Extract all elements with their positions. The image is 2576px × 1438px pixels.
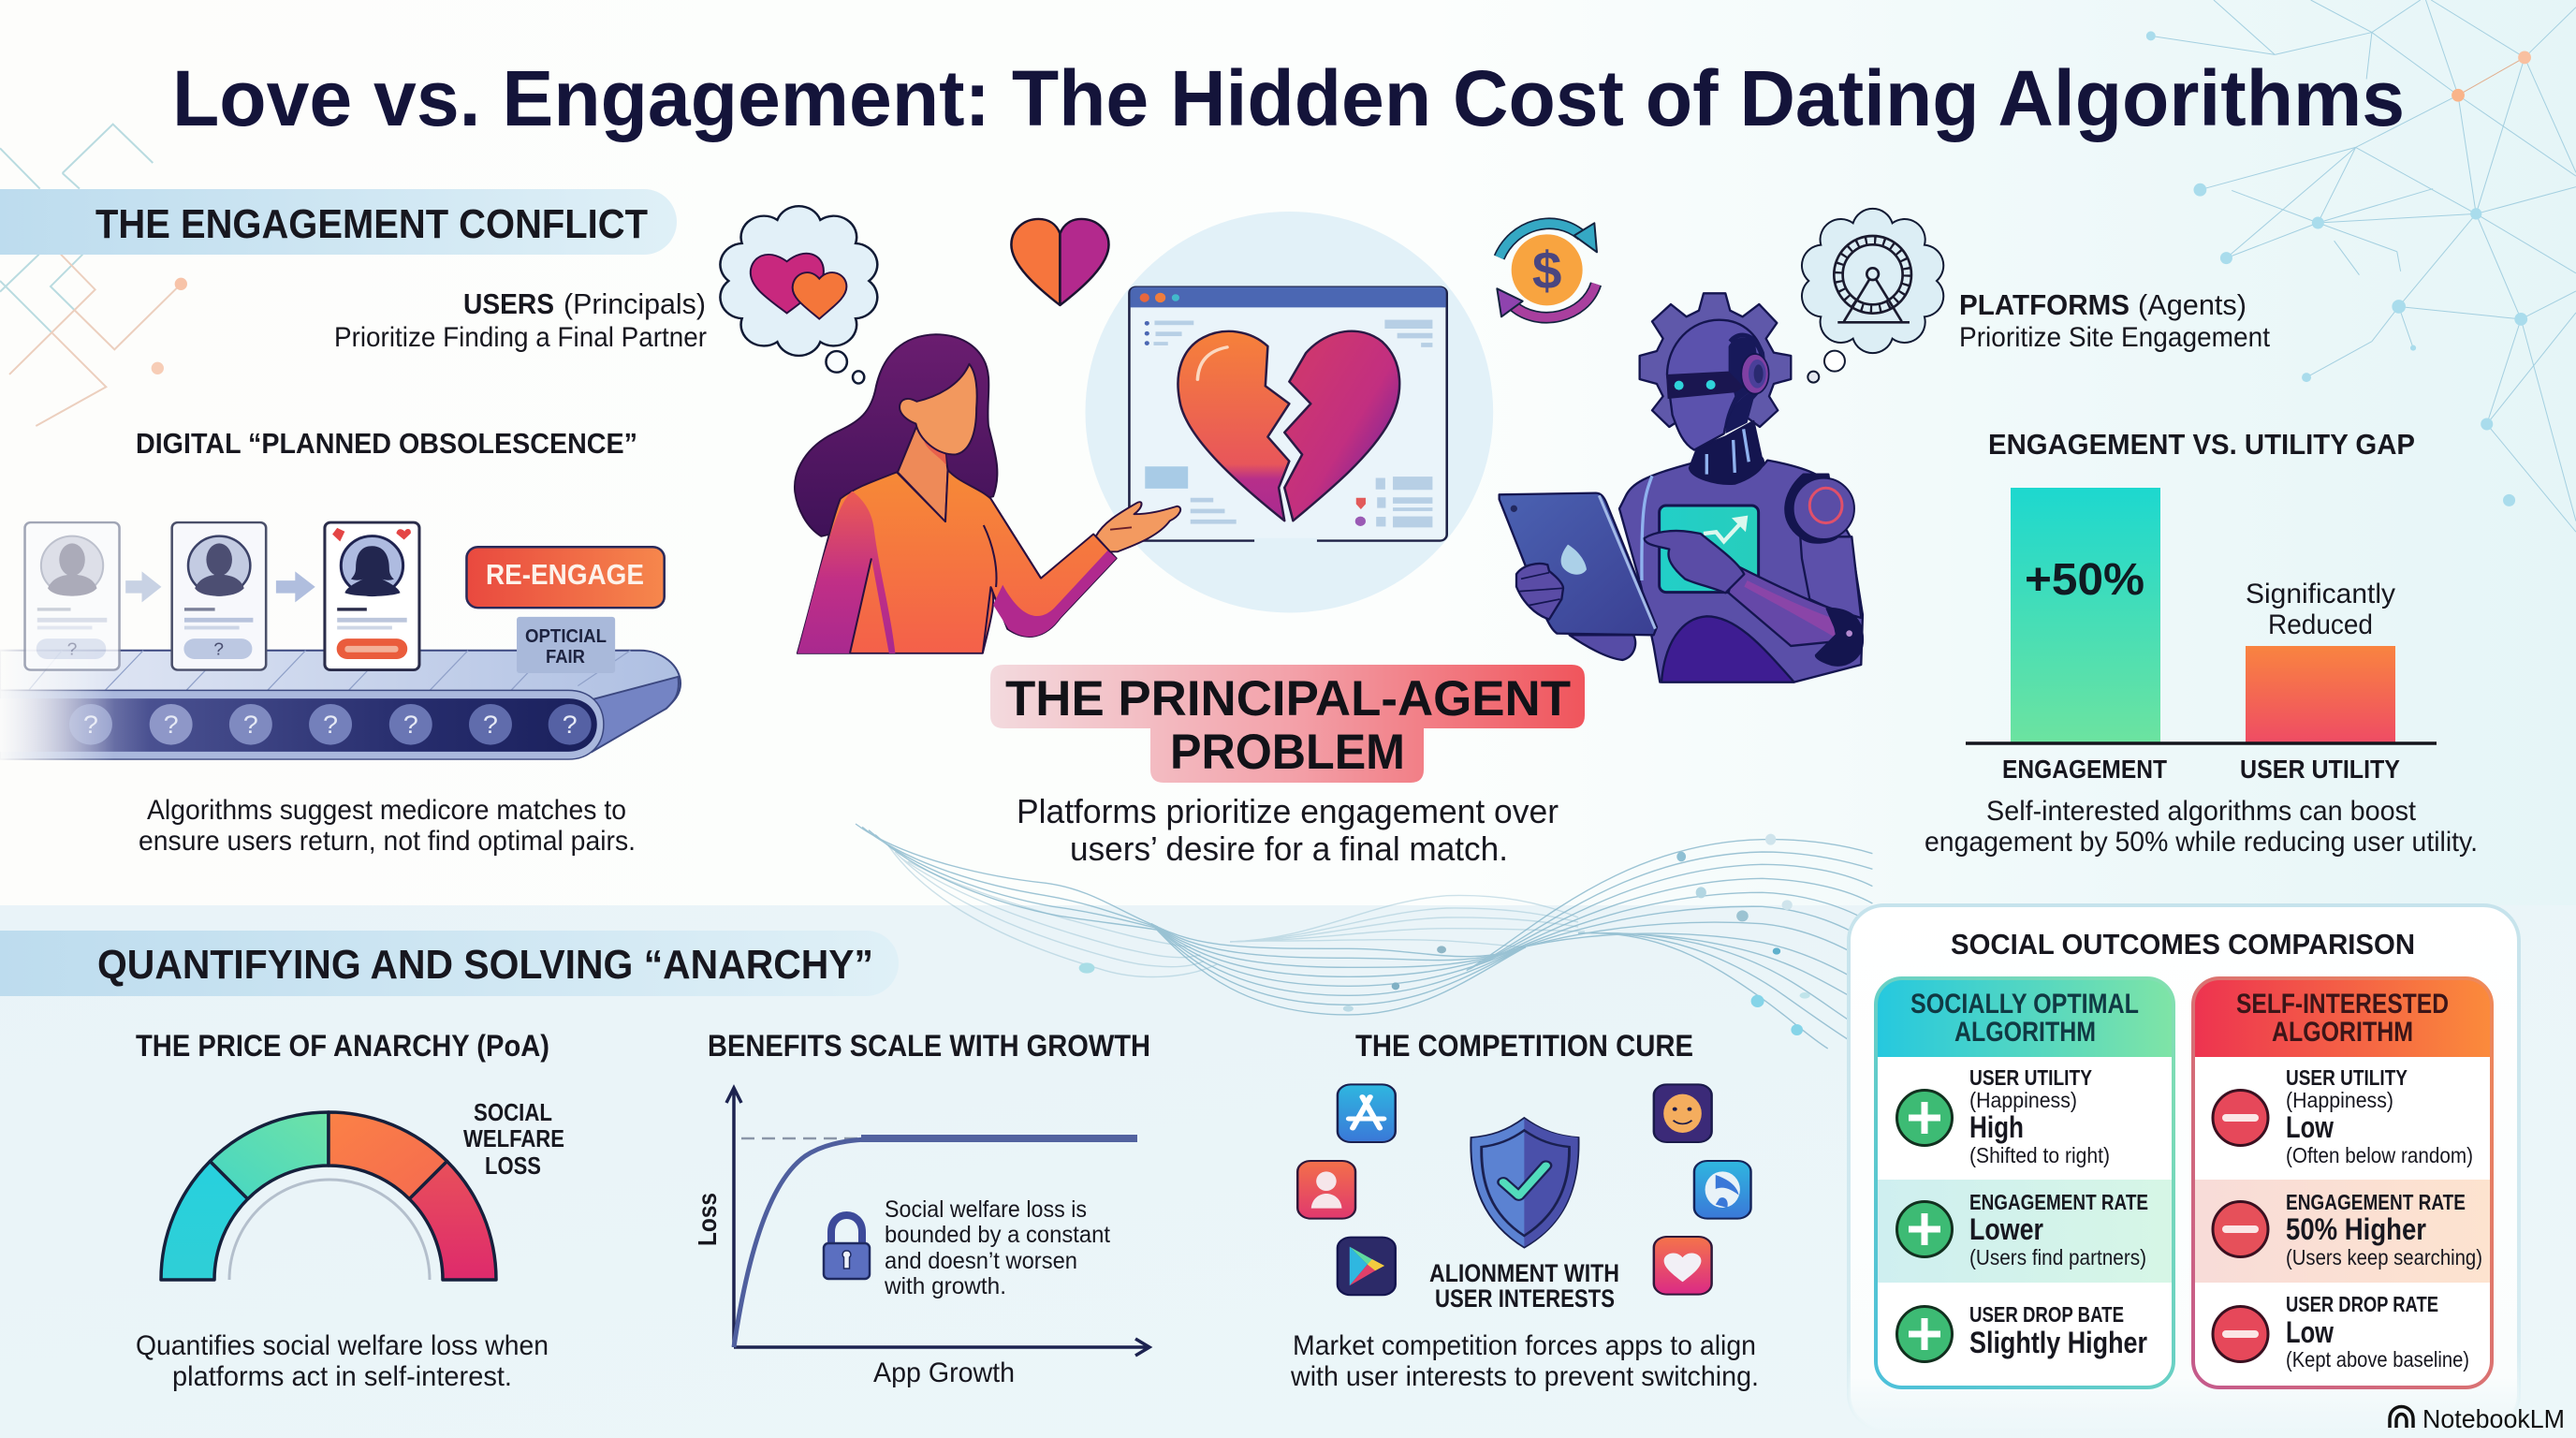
heading: price of anarchy: THE PRICE OF ANARCHY (PoA) bbox=[136, 1029, 549, 1063]
section banner: the engagement conflict: THE ENGAGEMENT CONFLICT bbox=[95, 201, 648, 247]
pointing arm bbox=[1645, 531, 1863, 666]
bar: user utility bbox=[2246, 646, 2395, 742]
value +50%: +50% bbox=[2025, 555, 2144, 605]
money cycle icon bbox=[1497, 223, 1597, 317]
heading: engagement vs utility gap: ENGAGEMENT VS. UTILITY GAP bbox=[1988, 428, 2415, 461]
bar chart bbox=[1966, 488, 2437, 784]
row: engagement rate bbox=[1896, 1190, 2148, 1269]
icon: lock bbox=[824, 1215, 870, 1279]
platforms label: (Agents) bbox=[2138, 288, 2247, 321]
value significantly reduced: Reduced bbox=[2268, 609, 2373, 640]
conveyor belt: ? bbox=[323, 711, 338, 739]
row: engagement rate: (Users keep searching) bbox=[2286, 1245, 2482, 1269]
split heart icon bbox=[1011, 219, 1108, 305]
icon: smile bbox=[1654, 1084, 1712, 1142]
row: user utility: (Happiness) bbox=[2286, 1088, 2393, 1112]
header text: SOCIALLY OPTIMAL bbox=[1910, 989, 2139, 1020]
profile card 2 bbox=[172, 522, 266, 670]
header text: ALGORITHM bbox=[1954, 1017, 2096, 1048]
row: engagement rate bbox=[2213, 1190, 2482, 1269]
body: self-interested algorithms bbox=[1925, 796, 2478, 858]
chart annotation: and doesn’t worsen bbox=[885, 1248, 1077, 1274]
row: user utility: (Happiness) bbox=[1969, 1088, 2077, 1112]
re-engage button bbox=[466, 547, 665, 608]
robot torso bbox=[1619, 461, 1863, 682]
browser window bbox=[1129, 287, 1447, 543]
decorative wave lines bbox=[856, 824, 1872, 1049]
row: user utility: High bbox=[1969, 1110, 2024, 1144]
gauge label: SOCIAL bbox=[474, 1098, 552, 1126]
arrow between cards 1 and 2 bbox=[125, 571, 161, 602]
section banner: the engagement conflict bbox=[0, 189, 677, 255]
y axis label: Loss bbox=[693, 1193, 722, 1246]
conveyor belt: ? bbox=[403, 711, 418, 739]
body: self-interested algorithms: Self-interested algorithms can boost bbox=[1986, 796, 2417, 827]
body: quantifies: platforms act in self-interest. bbox=[172, 1361, 512, 1392]
woman figure bbox=[795, 334, 1180, 653]
background top bbox=[0, 0, 2576, 906]
users label: Prioritize Finding a Final Partner bbox=[334, 322, 707, 353]
robot head bbox=[1666, 320, 1769, 450]
row: user utility bbox=[2213, 1065, 2473, 1167]
body: algorithms: Algorithms suggest medicore matches to bbox=[147, 795, 626, 826]
row: user utility bbox=[1896, 1065, 2110, 1167]
section banner: quantifying and solving anarchy: QUANTIFYING AND SOLVING “ANARCHY” bbox=[97, 942, 873, 988]
x axis label: App Growth bbox=[873, 1357, 1015, 1388]
thought bubble with hamster wheel bbox=[1802, 209, 1943, 383]
decorative circuit lines top left bbox=[0, 125, 187, 426]
optical fair label bbox=[525, 626, 607, 668]
gauge label: WELFARE bbox=[463, 1124, 564, 1152]
profile card 1: ? bbox=[67, 640, 77, 659]
icon: play store bbox=[1338, 1238, 1396, 1295]
row: user drop rate bbox=[2213, 1292, 2469, 1372]
body: platforms prioritize bbox=[1017, 792, 1559, 868]
conveyor belt: ? bbox=[483, 711, 498, 739]
gear bbox=[1640, 293, 1791, 427]
conveyor belt: ? bbox=[83, 711, 98, 739]
body: market competition: with user interests to prevent switching. bbox=[1290, 1361, 1759, 1392]
holding hand bbox=[1516, 564, 1563, 620]
profile card 2: ? bbox=[213, 640, 224, 659]
pale circle backdrop bbox=[1085, 212, 1493, 612]
icon: shield bbox=[1471, 1118, 1578, 1248]
money cycle icon: $ bbox=[1532, 242, 1561, 301]
robot illustration bbox=[1497, 209, 1943, 682]
body: algorithms bbox=[139, 795, 636, 857]
gauge label: LOSS bbox=[485, 1152, 541, 1180]
row: engagement rate: Lower bbox=[1969, 1212, 2043, 1246]
conveyor illustration bbox=[0, 522, 681, 768]
optical fair label: FAIR bbox=[546, 647, 586, 668]
header text bbox=[2236, 989, 2449, 1048]
profile card 1 bbox=[25, 522, 120, 670]
row: user drop rate: Low bbox=[2286, 1315, 2334, 1349]
platforms label: PLATFORMS bbox=[1959, 288, 2130, 321]
body: self-interested algorithms: engagement by 50% while reducing user utility. bbox=[1925, 827, 2478, 858]
column: self-interested algorithm bbox=[2193, 978, 2492, 1387]
chart annotation: Social welfare loss is bbox=[885, 1196, 1087, 1223]
heading: digital planned obsolescence: DIGITAL “PLANNED OBSOLESCENCE” bbox=[136, 427, 637, 460]
icon: app store bbox=[1338, 1084, 1396, 1142]
watermark: notebooklm: NotebookLM bbox=[2422, 1404, 2565, 1433]
row: engagement rate: ENGAGEMENT RATE bbox=[1969, 1190, 2148, 1214]
header text: SELF-INTERESTED bbox=[2236, 989, 2449, 1020]
heading: the competition cure: THE COMPETITION CURE bbox=[1355, 1029, 1693, 1063]
chest screen bbox=[1660, 506, 1759, 593]
column: socially optimal algorithm bbox=[1876, 978, 2174, 1387]
users label bbox=[334, 287, 707, 353]
users label: (Principals) bbox=[564, 287, 706, 320]
tablet bbox=[1500, 493, 1657, 635]
profile card 3 bbox=[325, 522, 419, 670]
label: alignment with user interests: USER INTERESTS bbox=[1435, 1284, 1615, 1313]
row: engagement rate: ENGAGEMENT RATE bbox=[2286, 1190, 2466, 1214]
row: user utility: Low bbox=[2286, 1110, 2334, 1144]
row: user drop rate: (Kept above baseline) bbox=[2286, 1347, 2469, 1372]
row: user drop rate: USER DROP RATE bbox=[2286, 1292, 2438, 1316]
body: market competition bbox=[1290, 1330, 1759, 1392]
optical fair tag bbox=[517, 617, 615, 673]
label: alignment with user interests: ALIONMENT WITH bbox=[1429, 1259, 1619, 1287]
line chart bbox=[693, 1088, 1149, 1388]
body: market competition: Market competition forces apps to align bbox=[1293, 1330, 1756, 1361]
heading: the principal-agent problem: THE PRINCIPAL-AGENT bbox=[1005, 671, 1571, 726]
body: platforms prioritize: Platforms prioritize engagement over bbox=[1017, 792, 1559, 830]
center illustration: user and broken heart bbox=[720, 206, 1493, 653]
platforms label: Prioritize Site Engagement bbox=[1959, 322, 2271, 353]
heading: the principal-agent problem bbox=[1005, 671, 1571, 780]
chart annotation: bounded by a constant bbox=[885, 1222, 1110, 1248]
conveyor belt: ? bbox=[243, 711, 258, 739]
heading: benefits scale with growth: BENEFITS SCALE WITH GROWTH bbox=[708, 1029, 1150, 1063]
icon: heart app bbox=[1654, 1237, 1712, 1295]
section banner: quantifying and solving anarchy bbox=[0, 931, 899, 996]
row: user drop rate: USER DROP BATE bbox=[1969, 1302, 2124, 1327]
principal-agent highlight box bbox=[990, 665, 1585, 783]
icon: person bbox=[1297, 1161, 1355, 1219]
header text: ALGORITHM bbox=[2272, 1017, 2413, 1048]
header text bbox=[1910, 989, 2139, 1048]
icon: globe bbox=[1694, 1161, 1750, 1219]
row: user utility: (Often below random) bbox=[2286, 1143, 2473, 1167]
conveyor belt: ? bbox=[164, 711, 179, 739]
bar: engagement bbox=[2011, 488, 2160, 742]
re-engage label: RE-ENGAGE bbox=[486, 558, 644, 591]
chart annotation: with growth. bbox=[884, 1273, 1006, 1299]
body: quantifies: Quantifies social welfare loss when bbox=[136, 1330, 549, 1361]
axis labels bbox=[2002, 755, 2400, 784]
row: user drop rate: Slightly Higher bbox=[1969, 1326, 2147, 1359]
gauge label bbox=[463, 1098, 564, 1180]
label: alignment with user interests bbox=[1429, 1259, 1619, 1313]
axis labels: ENGAGEMENT bbox=[2002, 755, 2167, 784]
users label: USERS bbox=[463, 287, 554, 320]
decorative network top right bbox=[2146, 0, 2576, 532]
row: user utility: (Shifted to right) bbox=[1969, 1143, 2110, 1167]
optical fair label: OPTICIAL bbox=[525, 626, 607, 647]
thought bubble with hearts bbox=[720, 206, 877, 384]
gauge chart bbox=[161, 1112, 496, 1280]
robot neck bbox=[1690, 421, 1764, 484]
heading: the principal-agent problem: PROBLEM bbox=[1170, 725, 1405, 780]
broken heart bbox=[1178, 331, 1399, 521]
row: engagement rate: 50% Higher bbox=[2286, 1212, 2426, 1246]
body: platforms prioritize: users’ desire for a final match. bbox=[1070, 829, 1508, 868]
body: algorithms: ensure users return, not find optimal pairs. bbox=[139, 826, 636, 857]
row: user utility: USER UTILITY bbox=[2286, 1065, 2408, 1090]
panel: social outcomes comparison bbox=[1849, 905, 2519, 1430]
background bottom section bbox=[0, 905, 2576, 1438]
row: engagement rate: (Users find partners) bbox=[1969, 1245, 2146, 1269]
row: user utility: USER UTILITY bbox=[1969, 1065, 2092, 1090]
value significantly reduced bbox=[2246, 579, 2395, 640]
lower left arm bbox=[1570, 635, 1635, 660]
row: user drop rate bbox=[1896, 1302, 2147, 1361]
panel heading: SOCIAL OUTCOMES COMPARISON bbox=[1951, 928, 2415, 961]
conveyor belt bbox=[0, 645, 681, 768]
platforms label bbox=[1959, 288, 2271, 353]
title: Love vs. Engagement: The Hidden Cost of Dating Algorithms bbox=[172, 54, 2405, 142]
body: quantifies bbox=[136, 1330, 549, 1392]
conveyor belt: ? bbox=[563, 711, 578, 739]
competition illustration bbox=[1297, 1084, 1750, 1295]
arrow between cards 2 and 3 bbox=[276, 571, 315, 602]
value significantly reduced: Significantly bbox=[2246, 579, 2395, 609]
axis labels: USER UTILITY bbox=[2240, 755, 2400, 784]
chart annotation bbox=[884, 1196, 1110, 1299]
